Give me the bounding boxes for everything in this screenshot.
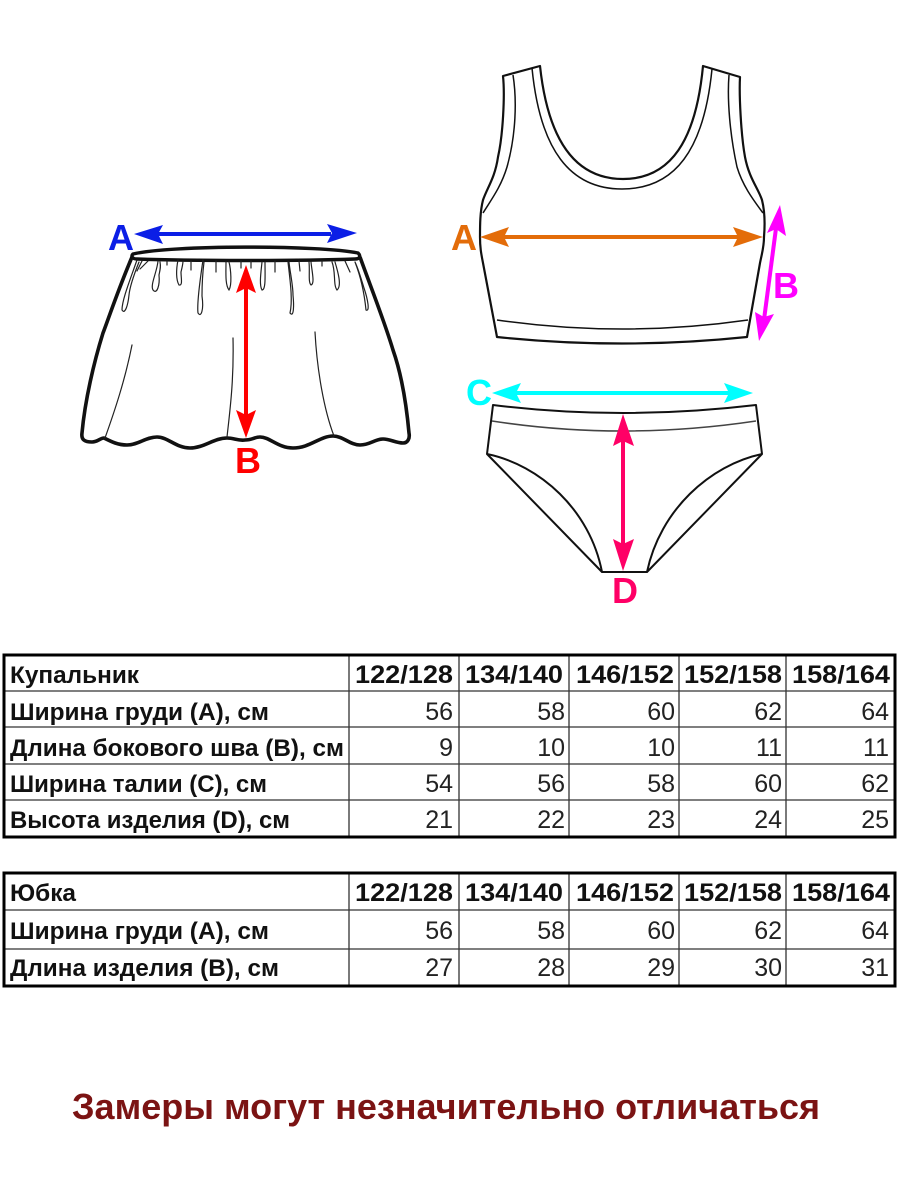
skirt header row: 122/128 — [355, 879, 453, 907]
row: chest width — [10, 917, 889, 945]
top label A: A — [451, 217, 477, 258]
briefs arrow C (cyan) — [492, 383, 753, 403]
skirt arrow B (red) — [236, 265, 256, 438]
row: side seam length: Длина бокового шва (B), см — [10, 735, 344, 762]
skirt waistband — [132, 247, 360, 260]
row: chest width: 58 — [537, 698, 565, 726]
row: item length: 30 — [754, 954, 782, 982]
row: side seam length: 10 — [537, 734, 565, 762]
skirt header row: 158/164 — [792, 879, 890, 907]
top label B: B — [773, 265, 799, 306]
row: item height: 24 — [754, 806, 782, 834]
row: chest width: 60 — [647, 698, 675, 726]
top hem band — [497, 320, 748, 329]
skirt diagram — [82, 247, 409, 448]
row: item height: 21 — [425, 806, 453, 834]
swimsuit header row: 152/158 — [684, 661, 782, 689]
briefs label D: D — [612, 570, 638, 611]
row: side seam length: 10 — [647, 734, 675, 762]
swimsuit header row: Купальник — [10, 662, 140, 689]
table: skirt sizes — [4, 873, 895, 986]
row: chest width: 64 — [861, 917, 889, 945]
row: item length — [10, 954, 889, 982]
row: chest width: 56 — [425, 698, 453, 726]
swimsuit header row: 158/164 — [792, 661, 890, 689]
skirt arrow A (blue) — [134, 224, 357, 244]
row: side seam length: 11 — [756, 734, 782, 762]
skirt header row: 134/140 — [465, 879, 563, 907]
row: item height: 23 — [647, 806, 675, 834]
row: waist width: 54 — [425, 770, 453, 798]
swimsuit header row — [10, 661, 890, 689]
row: item length: Длина изделия (B), см — [10, 955, 279, 982]
row: waist width: 58 — [647, 770, 675, 798]
row: waist width: 60 — [754, 770, 782, 798]
row: item height: 25 — [861, 806, 889, 834]
swimsuit header row: 146/152 — [576, 661, 674, 689]
row: item length: 27 — [425, 954, 453, 982]
briefs leg seams — [487, 454, 762, 572]
skirt header row — [10, 879, 890, 907]
row: item height: Высота изделия (D), см — [10, 807, 290, 834]
row: item length: 29 — [647, 954, 675, 982]
swimsuit header row: 122/128 — [355, 661, 453, 689]
row: chest width: Ширина груди (A), см — [10, 918, 269, 945]
top arrow B (magenta) — [755, 205, 786, 341]
swim briefs diagram — [487, 405, 762, 572]
row: chest width: 56 — [425, 917, 453, 945]
skirt table grid — [4, 873, 895, 986]
row: chest width: 62 — [754, 698, 782, 726]
top arrow A (orange) — [480, 227, 763, 247]
swimsuit header row: 134/140 — [465, 661, 563, 689]
footer note: Замеры могут незначительно отличаться — [72, 1086, 820, 1127]
row: waist width: Ширина талии (C), см — [10, 771, 267, 798]
skirt header row: 146/152 — [576, 879, 674, 907]
row: waist width: 62 — [861, 770, 889, 798]
row: waist width: 56 — [537, 770, 565, 798]
top armhole binding — [483, 75, 763, 213]
row: chest width: 58 — [537, 917, 565, 945]
row: side seam length — [10, 734, 889, 762]
row: chest width: Ширина груди (A), см — [10, 699, 269, 726]
skirt label B: B — [235, 440, 261, 481]
top neckline binding — [532, 68, 712, 189]
skirt outline — [82, 257, 409, 448]
row: side seam length: 9 — [439, 734, 453, 762]
briefs label C: C — [466, 372, 492, 413]
table: swimsuit sizes — [4, 655, 895, 837]
swimsuit table grid — [4, 655, 895, 837]
skirt gathers and folds — [105, 260, 368, 438]
briefs outline — [487, 405, 762, 572]
swim top diagram — [480, 66, 765, 344]
briefs arrow D (pink) — [613, 414, 634, 571]
row: chest width — [10, 698, 889, 726]
row: item length: 28 — [537, 954, 565, 982]
row: chest width: 64 — [861, 698, 889, 726]
row: item height: 22 — [537, 806, 565, 834]
row: item height — [10, 806, 889, 834]
top outline — [480, 66, 765, 344]
row: item length: 31 — [861, 954, 889, 982]
row: chest width: 60 — [647, 917, 675, 945]
skirt header row: Юбка — [10, 880, 77, 907]
skirt label A: A — [108, 217, 134, 258]
row: chest width: 62 — [754, 917, 782, 945]
skirt header row: 152/158 — [684, 879, 782, 907]
row: waist width — [10, 770, 889, 798]
row: side seam length: 11 — [863, 734, 889, 762]
briefs waistband seam — [492, 421, 756, 431]
